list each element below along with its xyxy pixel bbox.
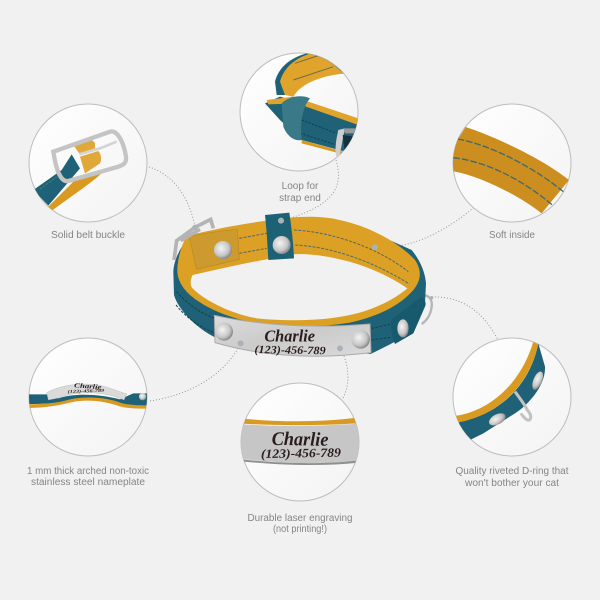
- front teal keeper: [391, 297, 426, 344]
- caption: laser engraving: [248, 513, 352, 535]
- icon: buckle: [53, 131, 126, 181]
- collar opening: [191, 254, 407, 320]
- teal outer band: [173, 228, 426, 354]
- caption: D-ring: [456, 466, 569, 489]
- panel: arched nameplate: [27, 338, 150, 456]
- panel: arched nameplate: (123)-456-789: [68, 388, 106, 394]
- icon: yellow edge: [30, 398, 146, 409]
- icon: yellow edge: [455, 342, 538, 423]
- caption: solid belt buckle: Solid belt buckle: [51, 230, 125, 241]
- nameplate: Charlie: [264, 327, 316, 346]
- buckle: [174, 219, 213, 260]
- icon: strap: [48, 173, 102, 212]
- panel: soft inside: [450, 104, 571, 222]
- stitching: [453, 139, 563, 205]
- icon: suede strip: [450, 127, 569, 213]
- caption: nameplate: 1 mm thick arched non-toxic: [27, 466, 149, 477]
- caption: loop for strap end: Loop for: [282, 181, 319, 192]
- panel: solid belt buckle: [29, 104, 147, 222]
- front band stitching: [176, 292, 392, 340]
- caption: D-ring: Quality riveted D-ring that: [456, 466, 569, 477]
- panel: laser engraving: [238, 383, 362, 501]
- icon: plate close up: [238, 423, 362, 463]
- icon: strap top: [275, 52, 345, 95]
- caption: nameplate: stainless steel nameplate: [31, 477, 145, 488]
- caption: loop for strap end: [279, 181, 321, 204]
- inner stitching: [239, 230, 409, 284]
- main collar illustration: [173, 213, 433, 357]
- caption: soft inside: Soft inside: [489, 230, 535, 241]
- leader lines: [149, 160, 498, 401]
- icon: strap lower: [265, 97, 358, 152]
- icon: buckle edge: [336, 128, 345, 159]
- teal loop: [265, 213, 294, 260]
- icon: rivets: [489, 413, 506, 426]
- engraved text: Charlie: [74, 382, 102, 391]
- nameplate: (123)-456-789: [254, 344, 326, 357]
- nameplate: [214, 315, 371, 357]
- strap end with rivet: [189, 229, 239, 269]
- icon: plate: [47, 384, 127, 400]
- icon: d-ring: [515, 392, 531, 420]
- caption: laser engraving: Durable laser engraving: [248, 513, 352, 524]
- panel: loop for strap end: [240, 52, 358, 171]
- caption: loop for strap end: strap end: [279, 193, 321, 204]
- caption: nameplate: [27, 466, 149, 488]
- caption: D-ring: won't bother your cat: [464, 478, 559, 489]
- yellow inner strap: [177, 217, 420, 326]
- D-ring on main collar: [415, 295, 432, 324]
- rivets: [214, 236, 409, 337]
- anchor dots: [192, 218, 433, 351]
- icon: teal band: [457, 343, 545, 440]
- engraving: Charlie: [272, 429, 329, 451]
- panel: laser engraving: (123)-456-789: [261, 446, 342, 461]
- icon: loop: [282, 96, 310, 140]
- caption: laser engraving: (not printing!): [273, 524, 327, 535]
- icon: yellow rim: [242, 418, 357, 425]
- panel: riveted D-ring: [453, 338, 571, 456]
- icon: teal edge: [27, 393, 150, 405]
